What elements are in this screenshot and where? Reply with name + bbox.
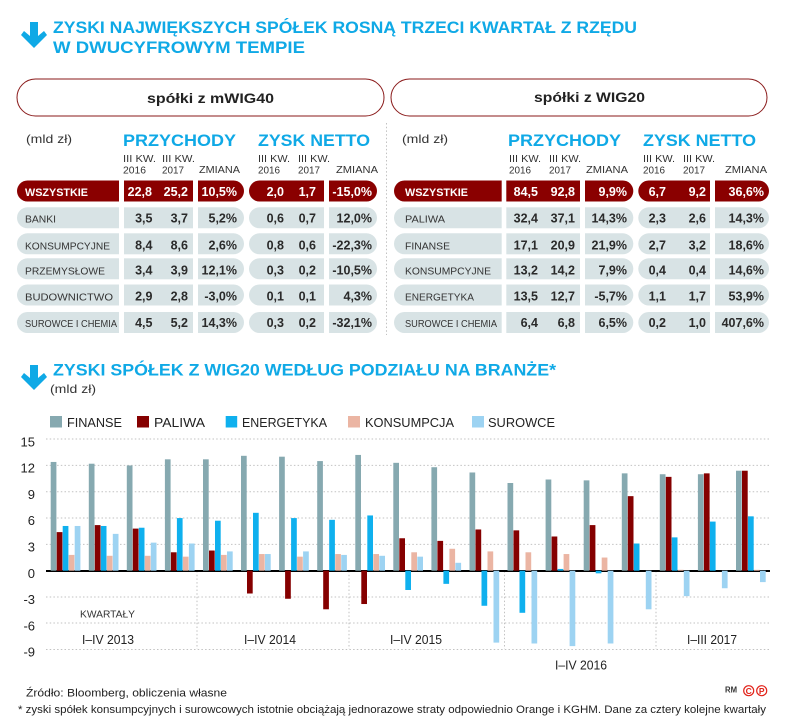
row: surowce i chemia: 407,6% — [722, 316, 764, 330]
header pill: mWIG40: spółki z mWIG40 — [147, 90, 274, 106]
zero axis — [46, 570, 770, 572]
column heading: przychody: 2016 — [123, 166, 146, 176]
row: energetyka: 1,1 — [649, 290, 666, 304]
row: budownictwo: BUDOWNICTWO — [25, 292, 113, 304]
column heading: zysk netto: 2017 — [298, 166, 320, 176]
row: budownictwo — [17, 284, 377, 306]
panel: WIG20 table — [391, 79, 769, 333]
row: wszystkie: 10,5% — [202, 185, 237, 199]
column heading: przychody: 2016 — [509, 166, 531, 176]
column heading: przychody — [508, 131, 628, 176]
row: konsumpcyjne: 8,4 — [135, 238, 153, 252]
row: surowce i chemia: 5,2 — [171, 316, 188, 330]
row: surowce i chemia: 4,5 — [135, 316, 153, 330]
main title: ZYSKI NAJWIĘKSZYCH SPÓŁEK ROSNĄ TRZECI KWARTAŁ Z RZĘDU — [53, 18, 637, 37]
row: konsumpcyjne: 14,2 — [551, 264, 575, 278]
row: surowce i chemia — [17, 312, 377, 333]
author and copyright marks: P — [759, 686, 765, 696]
row: banki: 0,7 — [299, 212, 316, 226]
row: konsumpcyjne: 0,6 — [299, 238, 316, 252]
row: surowce i chemia: SUROWCE I CHEMIA — [405, 318, 497, 330]
row: wszystkie: 22,8 — [128, 185, 152, 199]
bar chart — [21, 434, 770, 672]
row: banki — [17, 207, 377, 228]
bars — [51, 455, 766, 646]
author and copyright marks — [725, 686, 767, 696]
row: przemysłowe: 12,1% — [202, 264, 237, 278]
unit label: (mld zł) — [26, 132, 72, 146]
row: konsumpcyjne: 7,9% — [598, 264, 627, 278]
row: konsumpcyjne: 2,6% — [208, 238, 237, 252]
row: paliwa — [394, 207, 769, 228]
column heading: przychody: III KW. — [123, 154, 156, 165]
y axis labels: 0 — [28, 566, 35, 581]
header pill: WIG20 — [391, 79, 767, 116]
row: paliwa: 14,3% — [729, 212, 764, 226]
row: wszystkie: 92,8 — [551, 185, 575, 199]
row: wszystkie: -15,0% — [332, 185, 372, 199]
y axis labels: -3 — [23, 592, 35, 607]
column heading: przychody: ZMIANA — [199, 165, 240, 176]
row: paliwa: 14,3% — [592, 212, 627, 226]
icon: section down arrow — [21, 365, 47, 390]
column heading: przychody: 2017 — [162, 166, 184, 176]
row: wszystkie: 6,7 — [649, 185, 666, 199]
column heading: przychody: III KW. — [509, 154, 541, 165]
column heading: zysk netto: ZYSK NETTO — [643, 131, 756, 150]
row: banki: BANKI — [25, 214, 56, 226]
row: finanse: FINANSE — [405, 240, 450, 252]
row: budownictwo: 4,3% — [344, 290, 372, 304]
row: surowce i chemia: 6,4 — [521, 316, 538, 330]
row: wszystkie: 9,2 — [689, 185, 706, 199]
column heading: przychody: PRZYCHODY — [508, 131, 622, 150]
row: banki: 0,6 — [267, 212, 284, 226]
row: surowce i chemia: 1,0 — [689, 316, 706, 330]
row: energetyka: 13,5 — [514, 290, 538, 304]
row: energetyka: 53,9% — [729, 290, 764, 304]
row: budownictwo: 0,1 — [267, 290, 284, 304]
row: surowce i chemia — [394, 312, 769, 333]
row: przemysłowe: -10,5% — [332, 264, 372, 278]
row: przemysłowe — [17, 258, 377, 279]
main title: W DWUCYFROWYM TEMPIE — [53, 38, 305, 57]
y axis labels: 15 — [21, 434, 35, 450]
row: przemysłowe: 3,4 — [135, 264, 153, 278]
row: wszystkie: 2,0 — [267, 185, 284, 199]
footnote: * zyski spółek konsumpcyjnych i surowcowych istotnie obciążają jednorazowe straty odpowiednio Orange i KGHM. Dane za cztery kolejne kwartały — [18, 704, 767, 716]
x axis period labels: I–III 2017 — [687, 633, 737, 647]
column heading: zysk netto: 2016 — [258, 166, 280, 176]
author and copyright marks: C — [746, 686, 752, 696]
column heading: zysk netto: 2016 — [643, 166, 665, 176]
column heading: przychody: 2017 — [549, 166, 571, 176]
row: paliwa: 2,6 — [689, 212, 706, 226]
row: surowce i chemia: 14,3% — [202, 316, 237, 330]
row: surowce i chemia: 6,8 — [558, 316, 575, 330]
legend — [50, 416, 555, 430]
y axis labels: 3 — [28, 540, 35, 554]
column heading: zysk netto — [643, 131, 767, 176]
author and copyright marks: RM — [725, 686, 737, 695]
column heading: zysk netto: III KW. — [298, 154, 330, 165]
row: finanse: 2,7 — [649, 238, 666, 252]
row: przemysłowe: 0,3 — [267, 264, 284, 278]
legend: FINANSE — [67, 416, 122, 430]
y axis labels — [21, 434, 35, 660]
row: banki: 3,7 — [171, 212, 188, 226]
column heading: przychody: PRZYCHODY — [123, 131, 237, 150]
row: konsumpcyjne — [17, 233, 377, 254]
y axis labels: 12 — [21, 460, 35, 476]
section title: ZYSKI SPÓŁEK Z WIG20 WEDŁUG PODZIAŁU NA BRANŻE* — [53, 361, 556, 380]
row: banki: 12,0% — [337, 212, 372, 226]
unit label: (mld zł) — [402, 132, 448, 146]
chart unit label: (mld zł) — [50, 382, 96, 396]
source line: Źródło: Bloomberg, obliczenia własne — [26, 686, 227, 700]
x axis period labels: KWARTAŁY — [80, 610, 135, 621]
header pill: mWIG40 — [17, 79, 384, 116]
column heading: zysk netto: III KW. — [643, 154, 675, 165]
row: budownictwo: -3,0% — [204, 290, 237, 304]
row: energetyka: ENERGETYKA — [405, 292, 474, 304]
x axis period labels — [80, 610, 737, 672]
row: finanse: 3,2 — [689, 238, 706, 252]
row: konsumpcyjne — [394, 258, 769, 279]
column heading: przychody: III KW. — [162, 154, 195, 165]
row: energetyka: 1,7 — [689, 290, 706, 304]
row: energetyka — [394, 284, 769, 306]
row: konsumpcyjne: KONSUMPCYJNE — [25, 240, 110, 252]
row: wszystkie: 84,5 — [514, 185, 538, 199]
y axis labels: 6 — [28, 513, 35, 528]
column heading: zysk netto: ZMIANA — [336, 165, 378, 176]
y axis labels: 9 — [28, 487, 35, 502]
row: paliwa: 37,1 — [551, 212, 575, 226]
row: konsumpcyjne: 13,2 — [514, 264, 538, 278]
row: surowce i chemia: 0,2 — [299, 316, 316, 330]
row: paliwa: 32,4 — [514, 212, 538, 226]
row: konsumpcyjne: 0,8 — [267, 238, 284, 252]
row: konsumpcyjne: 0,4 — [649, 264, 666, 278]
column heading: zysk netto: 2017 — [683, 166, 705, 176]
column heading: zysk netto: III KW. — [683, 154, 715, 165]
row: surowce i chemia: 0,2 — [649, 316, 666, 330]
row: finanse: 17,1 — [514, 238, 538, 252]
row: finanse — [394, 233, 769, 254]
column heading: zysk netto: ZYSK NETTO — [258, 131, 370, 150]
row: wszystkie: 36,6% — [729, 185, 764, 199]
x axis period labels: I–IV 2014 — [244, 633, 296, 647]
row: wszystkie: WSZYSTKIE — [25, 187, 88, 199]
icon: top down arrow — [21, 22, 47, 48]
row: budownictwo: 2,9 — [135, 290, 153, 304]
row: surowce i chemia: -32,1% — [332, 316, 372, 330]
row: finanse: 18,6% — [729, 238, 764, 252]
y axis labels: -9 — [23, 644, 35, 660]
x axis period labels: I–IV 2016 — [555, 658, 607, 672]
row: wszystkie: WSZYSTKIE — [405, 187, 468, 199]
row: konsumpcyjne: 8,6 — [171, 238, 188, 252]
row: surowce i chemia: 0,3 — [267, 316, 284, 330]
legend: KONSUMPCJA — [365, 416, 455, 430]
panel: mWIG40 table — [17, 79, 384, 333]
row: paliwa: PALIWA — [405, 214, 445, 226]
column heading: przychody — [123, 131, 240, 176]
row: wszystkie — [394, 180, 769, 202]
row: banki: 3,5 — [135, 212, 153, 226]
row: energetyka: -5,7% — [594, 290, 627, 304]
main title — [53, 18, 637, 57]
column heading: przychody: III KW. — [549, 154, 581, 165]
row: budownictwo: 0,1 — [299, 290, 316, 304]
column heading: zysk netto — [258, 131, 378, 176]
row: wszystkie — [17, 180, 377, 202]
row: surowce i chemia: 6,5% — [598, 316, 627, 330]
row: konsumpcyjne: 14,6% — [729, 264, 764, 278]
row: konsumpcyjne: KONSUMPCYJNE — [405, 266, 491, 278]
row: przemysłowe: 3,9 — [171, 264, 188, 278]
row: energetyka: 12,7 — [551, 290, 575, 304]
row: wszystkie: 1,7 — [299, 185, 316, 199]
column heading: zysk netto: III KW. — [258, 154, 290, 165]
row: konsumpcyjne: 0,4 — [689, 264, 706, 278]
legend: PALIWA — [154, 416, 206, 430]
row: finanse: 20,9 — [551, 238, 575, 252]
x axis period labels: I–IV 2013 — [82, 633, 134, 647]
row: banki: 5,2% — [208, 212, 237, 226]
row: surowce i chemia: SUROWCE I CHEMIA — [25, 318, 117, 330]
column heading: zysk netto: ZMIANA — [725, 165, 767, 176]
legend: ENERGETYKA — [242, 416, 328, 430]
y axis labels: -6 — [23, 618, 35, 634]
row: finanse: 21,9% — [592, 238, 627, 252]
row: wszystkie: 9,9% — [598, 185, 627, 199]
row: budownictwo: 2,8 — [171, 290, 188, 304]
row: konsumpcyjne: -22,3% — [332, 238, 372, 252]
x axis period labels: I–IV 2015 — [390, 633, 442, 647]
row: wszystkie: 25,2 — [164, 185, 188, 199]
row: przemysłowe: 0,2 — [299, 264, 316, 278]
column heading: przychody: ZMIANA — [586, 165, 628, 176]
row: przemysłowe: PRZEMYSŁOWE — [25, 266, 105, 278]
legend: SUROWCE — [488, 416, 555, 430]
row: paliwa: 2,3 — [649, 212, 666, 226]
header pill: WIG20: spółki z WIG20 — [534, 89, 645, 105]
